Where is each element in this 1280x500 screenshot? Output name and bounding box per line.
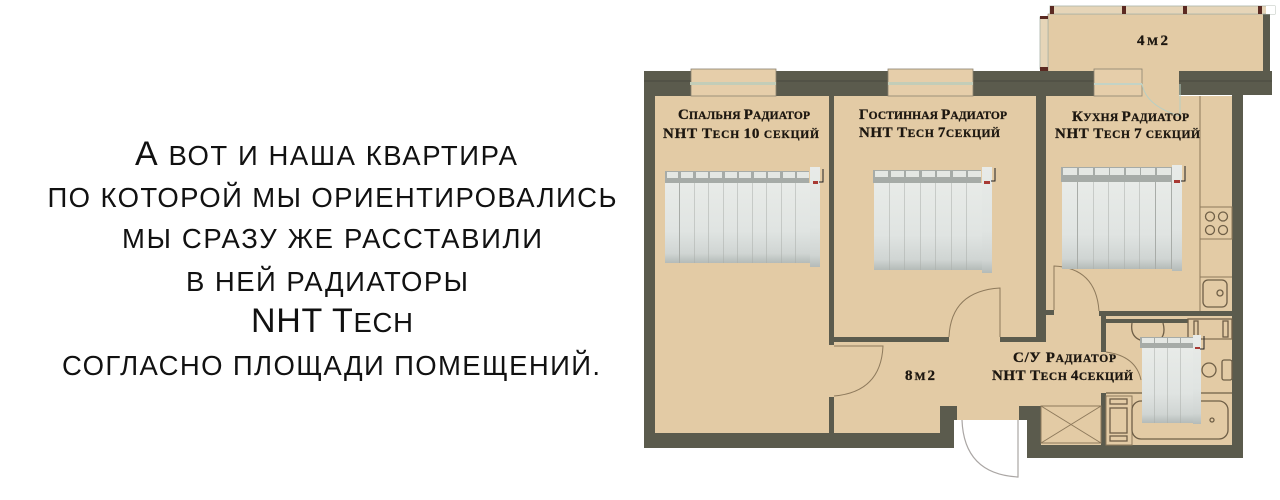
floor plan <box>644 6 1275 480</box>
label: bathroom: С/У РАДИАТОР <box>1013 350 1116 366</box>
label: bedroom: NHT TECH 10 СЕКЦИЙ <box>663 126 819 142</box>
kitchen fixtures <box>1200 96 1232 311</box>
text block: intro <box>48 135 616 381</box>
outer walls <box>644 71 1272 458</box>
floor: apartment <box>655 96 1232 445</box>
label: bedroom <box>663 107 819 142</box>
text block: intro: В НЕЙ РАДИАТОРЫ <box>186 266 468 297</box>
text block: intro: СОГЛАСНО ПЛОЩАДИ ПОМЕЩЕНИЙ. <box>62 350 600 381</box>
radiator: kitchen, 7 sections <box>1061 165 1185 271</box>
text block: intro: ПО КОТОРОЙ МЫ ОРИЕНТИРОВАЛИСЬ <box>48 182 616 213</box>
bathroom fixtures <box>1041 319 1232 445</box>
label: living room: NHT TECH 7СЕКЦИЙ <box>859 125 1000 141</box>
label: hallway area: 8М2 <box>905 368 935 384</box>
label: balcony area: 4М2 <box>1137 33 1168 49</box>
label: kitchen <box>1055 109 1200 142</box>
label: kitchen: NHT TECH 7 СЕКЦИЙ <box>1055 126 1200 142</box>
label: kitchen: КУХНЯ РАДИАТОР <box>1072 109 1189 125</box>
label: living room: ГОСТИННАЯ РАДИАТОР <box>859 107 1007 123</box>
label: living room <box>859 107 1007 141</box>
windows <box>690 69 1180 116</box>
entry door <box>955 420 1027 480</box>
label: bathroom: NHT TECH 4СЕКЦИЙ <box>992 368 1133 384</box>
doors <box>834 266 1141 396</box>
label: bedroom: СПАЛЬНЯ РАДИАТОР <box>678 107 810 123</box>
radiator: living room, 7 sections <box>873 167 995 273</box>
text block: intro: МЫ СРАЗУ ЖЕ РАССТАВИЛИ <box>122 223 542 254</box>
balcony <box>1040 6 1275 100</box>
inner walls <box>829 96 1232 445</box>
label: bathroom <box>992 350 1133 384</box>
radiator: bathroom, 4 sections <box>1140 335 1204 424</box>
text block: intro: NHT TECH <box>251 302 413 340</box>
radiator: bedroom, 10 sections <box>665 167 823 267</box>
text block: intro: А ВОТ И НАША КВАРТИРА <box>135 135 518 173</box>
